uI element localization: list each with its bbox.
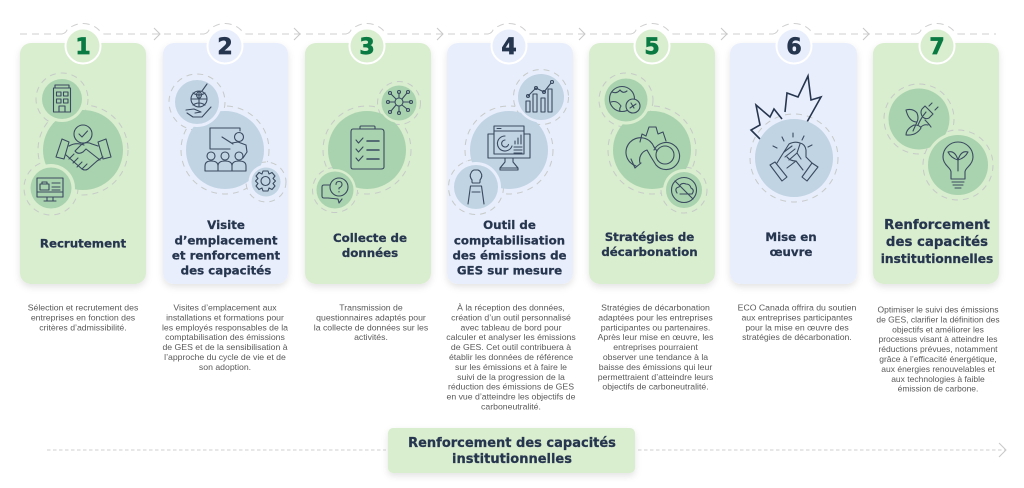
arrows on process line [154,28,869,40]
text block: step 6: stratégies de décarbonation. [742,332,852,342]
heading: Outil de [483,218,536,232]
panel: step 2 visite [163,28,288,284]
icon group: decarbonization [599,73,707,213]
text block: step 4: sur les émissions et à faire le [455,362,567,372]
text block: step 5: permettraient d’atteindre leurs [598,372,714,382]
text block: step 2: les employés responsables de la [162,322,288,332]
text block: step 4: carboneutralité. [481,402,541,412]
heading: des capacités [886,234,988,250]
step number 6 [776,28,812,64]
step number 1 [66,28,100,64]
heading: données [342,246,398,260]
heading: et renforcement [172,248,281,262]
text block: step 3: activités. [354,332,388,342]
panel: step 4 outil [447,28,573,284]
text block: step 2: l’approche du cycle de vie et de [164,352,286,362]
text block: step 2: de GES et de la sensibilisation à [162,342,288,352]
panel: step 3 collecte [305,28,431,284]
heading: Collecte de [333,231,407,245]
step number 3 [350,28,384,64]
heading: d’emplacement [174,234,278,248]
heading: comptabilisation [454,234,565,248]
text block: step 3: la collecte de données sur les [314,322,429,332]
text block: step 5: Stratégies de décarbonation [601,302,710,312]
heading: institutionnelles [881,252,993,266]
text block: step 1: entreprises en fonction des [31,312,136,322]
step number 5: 5 [644,35,660,60]
text block: step 3: Transmission de [339,302,403,312]
text block: step 5: Après leur mise en œuvre, les [598,332,714,342]
step number 7: 7 [929,35,945,60]
heading: des capacités [181,264,271,278]
heading: œuvre [770,245,812,259]
text block: step 5: observer une tendance à la [603,352,708,362]
text block: step 7: grâce à l’efficacité énergétique, [879,354,997,364]
step number 4 [492,28,526,64]
text block: step 7: réductions prévues, notamment [878,344,998,354]
text block: step 7: processus visant à atteindre les [878,334,998,344]
step number 1: 1 [75,35,91,60]
panel: step 5 strategies [589,28,715,284]
bottom banner: institutionnelles [452,452,572,467]
bottom dashed arrow line [47,443,1006,457]
step number 6: 6 [786,35,802,60]
text block: step 6: aux entreprises participantes [741,312,853,322]
text block: step 7: objectifs et améliorer les [892,324,984,334]
text block: step 1: critères d’admissibilité. [39,322,127,332]
text block: step 5: entreprises pourraient [613,342,698,352]
heading: Renforcement [884,218,991,233]
panel: step 7 renforcement [873,28,999,284]
step number 5 [634,28,670,64]
text block: step 7: aux technologies à faible [891,374,985,384]
text block: step 5: participantes ou partenaires. [601,322,710,332]
text block: step 3: questionnaires adaptés pour [316,312,426,322]
text block: step 4: création d’un outil personnalisé [451,312,571,322]
text block: step 4: suivi de la progression de la [457,372,565,382]
icon group: data collection [312,82,420,212]
text block: step 1: Sélection et recrutement des [28,302,139,312]
text block: step 5: baisse des émissions qui leur [599,362,712,372]
text block: step 2: Visites d’emplacement aux [173,302,277,312]
step number 2 [208,28,242,64]
bottom banner [388,428,635,473]
step number 7 [920,28,954,64]
heading: GES sur mesure [457,264,562,278]
step number 3: 3 [359,35,375,60]
text block: step 7: aux énergies renouvelables et [881,364,995,374]
text block: step 4: avec tableau de bord pour [461,322,562,332]
icon group: joined hands [745,70,838,202]
text block: step 2: comptabilisation des émissions [165,332,286,342]
text block: step 4: calculer et analyser les émissions [446,332,576,342]
panel: step 6 mise en oeuvre [730,28,857,284]
icon group: recruitment [24,73,128,215]
text block: step 4: établir les données de référence [449,352,573,362]
heading: Stratégies de [605,230,694,244]
heading: Visite [207,218,245,232]
icon group: green energy [884,84,993,200]
step number 4: 4 [501,35,517,60]
text block: step 2: installations et formations pour [166,312,284,322]
text block: step 6: ECO Canada offrira du soutien [738,302,856,312]
top dashed process line [20,24,996,34]
panel: step 1 recrutement [20,28,146,284]
text block: step 7: de GES, clarifier la définition des [876,314,1000,324]
text block: step 6: pour la mise en œuvre des [745,322,849,332]
heading: des émissions de [452,248,567,262]
heading: Mise en [765,230,817,244]
text block: step 2: son adoption. [199,362,251,372]
text block: step 7: Optimiser le suivi des émissions [878,304,998,314]
bottom banner: Renforcement des capacités [408,436,616,451]
icon group: training [169,74,286,202]
text block: step 4: réduction des émissions de GES [448,382,574,392]
step number 2: 2 [217,35,233,60]
text block: step 4: en vue d’atteindre les objectifs de [447,392,576,402]
text block: step 4: À la réception des données, [457,302,565,312]
text block: step 4: de GES. Cet outil contribuera à [451,342,571,352]
text block: step 7: émission de carbone. [898,384,978,394]
text block: step 5: objectifs de carboneutralité. [602,382,709,392]
heading: décarbonation [601,245,698,259]
text block: step 5: adaptées pour les entreprises [598,312,713,322]
heading: Recrutement [40,236,126,250]
icon group: tool [448,70,568,214]
